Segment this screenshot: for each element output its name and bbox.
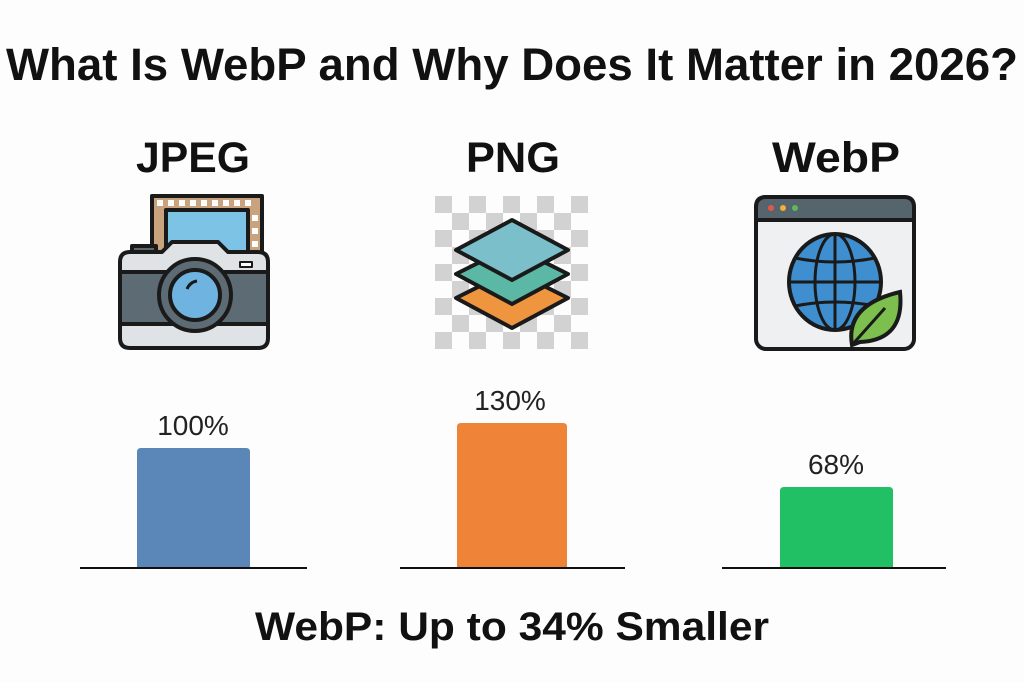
label: 130%: 130%: [474, 385, 546, 416]
footer caption: WebP: Up to 34% Smaller: [255, 605, 769, 649]
label: 68%: 68%: [808, 449, 864, 480]
icon: browser globe leaf: [756, 197, 914, 349]
icon: camera: [120, 196, 268, 348]
heading: JPEG: JPEG: [136, 134, 250, 182]
bar: PNG 130%: [457, 423, 567, 567]
label: 100%: 100%: [157, 410, 229, 441]
icon: layers over checkerboard: [435, 196, 588, 349]
heading: WebP: WebP: [772, 134, 900, 182]
heading: PNG: PNG: [466, 134, 560, 182]
title: What Is WebP and Why Does It Matter in 2026?: [6, 39, 1018, 90]
bar: JPEG 100%: [137, 448, 250, 567]
bar chart: [80, 385, 946, 568]
bar: WebP 68%: [780, 487, 893, 567]
